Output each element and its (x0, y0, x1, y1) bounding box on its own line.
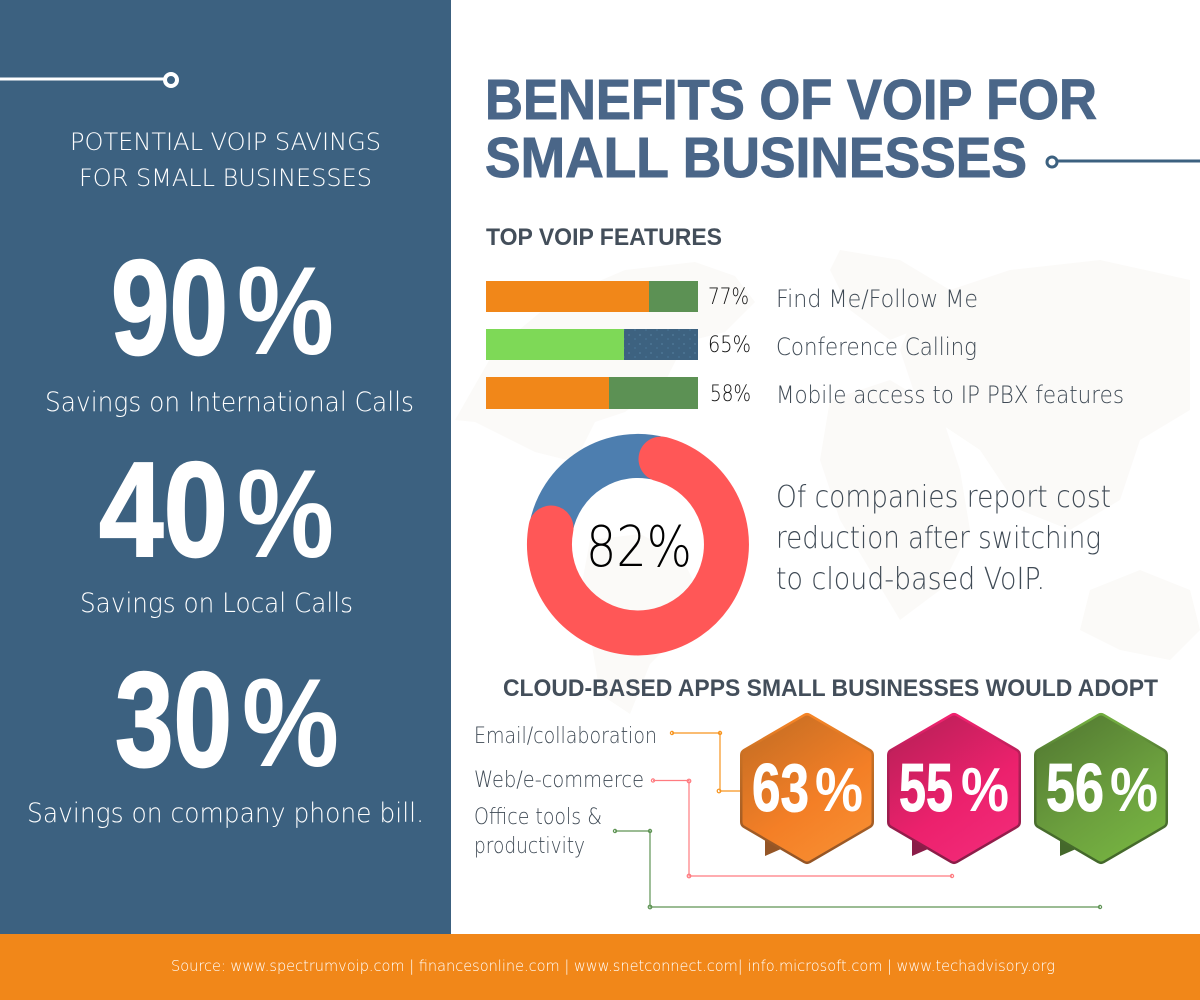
decorative connector top left (0, 74, 177, 86)
badge: 56 percent (1041, 720, 1161, 857)
badge: 63 percent (747, 720, 867, 857)
stat: 90 percent: Savings on International Calls (45, 387, 414, 418)
stat: 30 percent: Savings on company phone bill. (27, 798, 424, 829)
app labels: Web/e-commerce (474, 768, 644, 793)
text: cost reduction: Of companies report cost (776, 480, 1111, 515)
footer: sources: Source: www.spectrumvoip.com | financesonline.com | www.snetconnect.com| info.microsoft.com | www.techadvisory.org (171, 957, 1055, 975)
connector: orange (670, 731, 740, 793)
stat: 30 percent (27, 644, 424, 829)
panel heading: POTENTIAL VOIP SAVINGS (70, 128, 381, 156)
stat: 40 percent: 40 (99, 434, 228, 585)
badge: 56 percent: 56 (1046, 750, 1104, 826)
badge: 63 percent: 63 (752, 750, 809, 826)
text: cost reduction (776, 480, 1111, 597)
bar: find me follow me: 77% (708, 285, 749, 310)
badge: 55 percent (894, 720, 1014, 857)
panel heading (70, 128, 381, 192)
stat: 40 percent: % (237, 445, 334, 584)
world map background (455, 250, 1200, 714)
bar: mobile access (486, 377, 1124, 409)
bar: conference calling: 65% (708, 333, 751, 358)
footer: sources (0, 934, 1200, 1000)
bar: find me follow me (486, 281, 978, 313)
stat: 90 percent (45, 232, 414, 418)
badge: 55 percent: % (961, 756, 1009, 825)
stat: 30 percent: 30 (115, 644, 232, 795)
bar: mobile access: Mobile access to IP PBX features (776, 381, 1124, 409)
panel: potential savings (0, 0, 451, 934)
connector: green (613, 829, 1102, 909)
app labels: Office tools & (474, 805, 602, 830)
heading: cloud-based apps: CLOUD-BASED APPS SMALL BUSINESSES WOULD ADOPT (503, 675, 1158, 702)
app labels: productivity (474, 834, 585, 859)
title (485, 68, 1097, 190)
donut chart: 82 percent: 82% (586, 515, 692, 580)
text: cost reduction: reduction after switching (776, 521, 1101, 556)
decorative connector beside title (1047, 157, 1200, 167)
panel heading: FOR SMALL BUSINESSES (79, 164, 372, 192)
bar: conference calling (486, 329, 977, 361)
connector: red (651, 779, 954, 878)
stat: 40 percent (80, 434, 353, 619)
title: BENEFITS OF VOIP FOR (485, 68, 1097, 132)
stat: 90 percent: % (237, 242, 334, 381)
app labels: Email/collaboration (474, 724, 657, 749)
app labels (474, 724, 657, 859)
bar: conference calling: Conference Calling (776, 333, 977, 361)
badge: 63 percent: % (815, 756, 863, 825)
title: SMALL BUSINESSES (485, 126, 1027, 190)
stat: 30 percent: % (242, 654, 339, 793)
stat: 40 percent: Savings on Local Calls (80, 588, 353, 619)
stat: 90 percent: 90 (111, 232, 228, 383)
donut chart: 82 percent (549, 456, 726, 633)
badge: 55 percent: 55 (899, 750, 953, 826)
heading: top voip features: TOP VOIP FEATURES (486, 224, 722, 251)
text: cost reduction: to cloud-based VoIP. (776, 562, 1045, 597)
bar: mobile access: 58% (710, 382, 751, 407)
badge: 56 percent: % (1110, 756, 1158, 825)
bar: find me follow me: Find Me/Follow Me (776, 285, 978, 313)
